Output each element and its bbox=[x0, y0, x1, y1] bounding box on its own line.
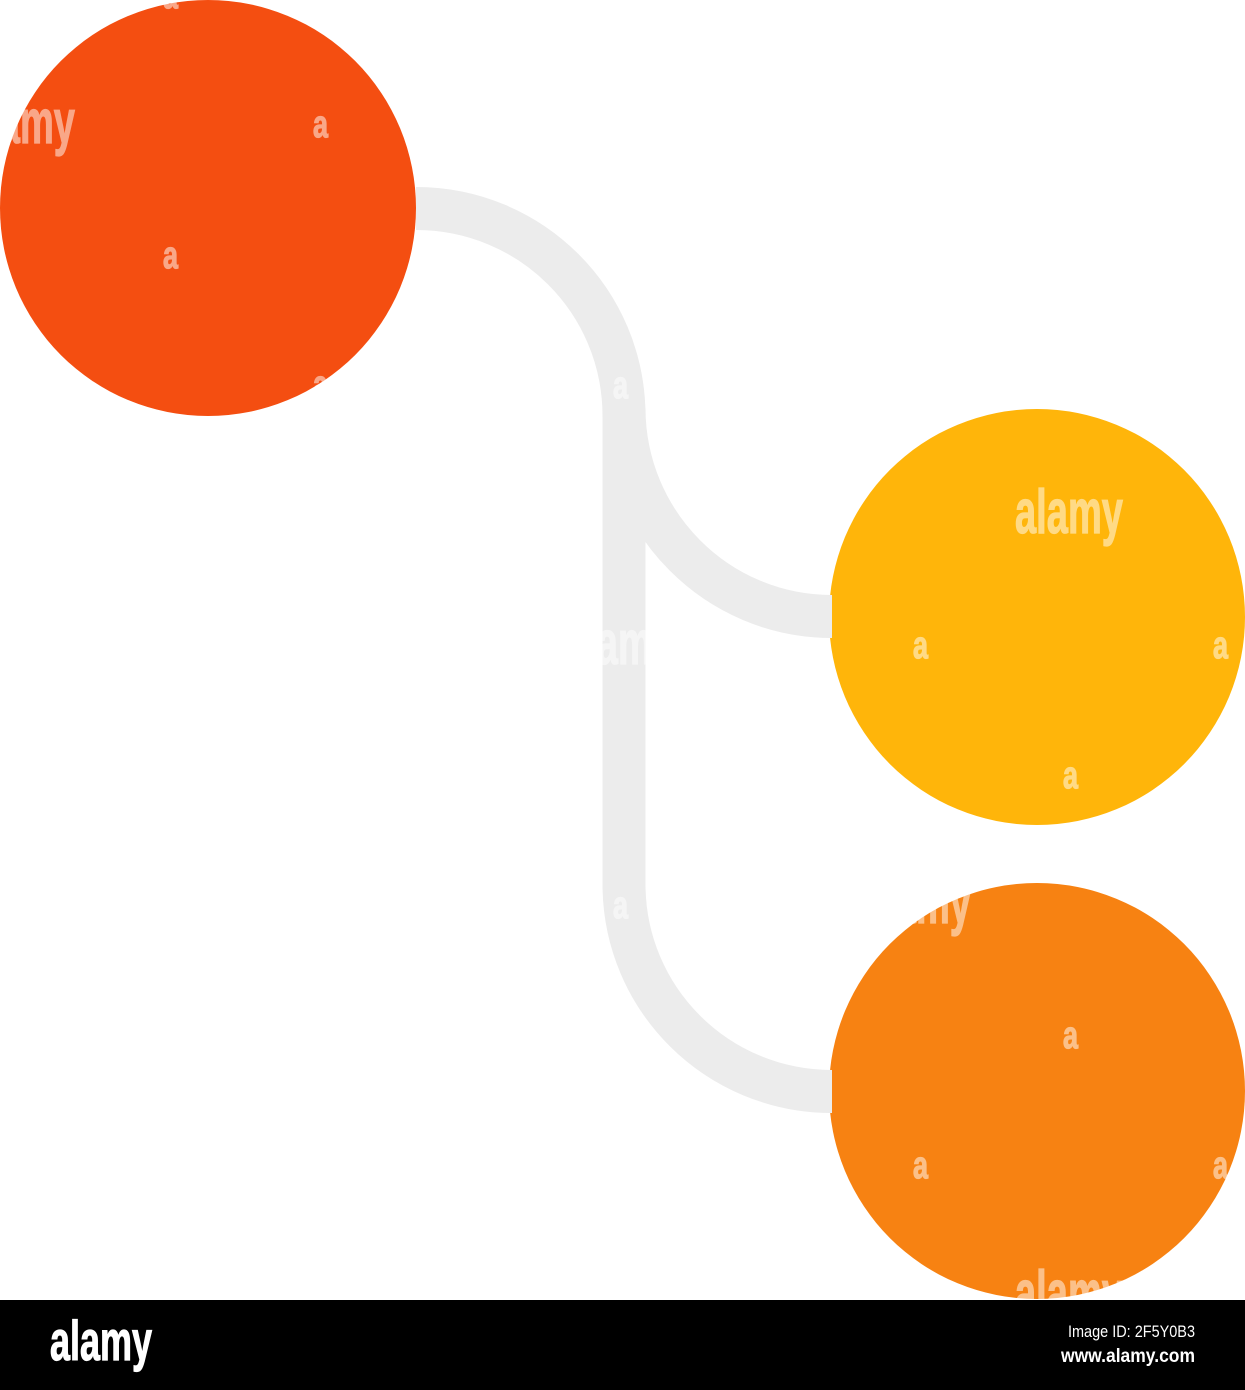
watermark pattern: a bbox=[1063, 755, 1079, 797]
footer bar bbox=[0, 1300, 1245, 1390]
watermark pattern: a bbox=[1213, 1145, 1229, 1187]
watermark pattern: alamy bbox=[1015, 1259, 1123, 1328]
watermark pattern: alamy bbox=[863, 868, 971, 937]
watermark pattern: a bbox=[613, 365, 629, 407]
watermark pattern: a bbox=[313, 104, 329, 146]
watermark pattern: a bbox=[913, 625, 929, 667]
node: red source circle bbox=[0, 0, 416, 416]
watermark pattern: alamy bbox=[1015, 478, 1123, 547]
watermark pattern: a bbox=[163, 235, 179, 277]
website url: www.alamy.com bbox=[1060, 1346, 1195, 1367]
watermark pattern: a bbox=[913, 1145, 929, 1187]
image id: Image ID: 2F5Y0B3 bbox=[1068, 1322, 1195, 1341]
watermark pattern: a bbox=[313, 364, 329, 406]
node: yellow target circle bbox=[829, 409, 1245, 825]
footer logo: alamy bbox=[50, 1309, 152, 1372]
watermark pattern: a bbox=[1213, 625, 1229, 667]
watermark pattern: alamy bbox=[565, 609, 673, 678]
watermark pattern: a bbox=[1063, 1015, 1079, 1057]
node: orange target circle bbox=[829, 883, 1245, 1299]
watermark pattern: a bbox=[613, 885, 629, 927]
connector: branching lines from red circle to yellow and orange circles bbox=[416, 208, 832, 1092]
